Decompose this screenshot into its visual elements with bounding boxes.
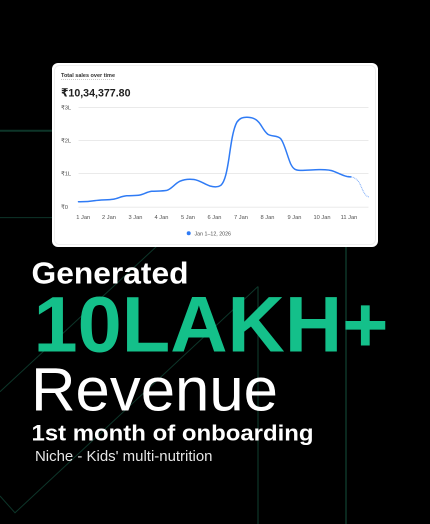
chart: x axis labels [76, 215, 357, 221]
heading: Generated: Generated [32, 256, 188, 290]
chart: x axis labels: 8 Jan [261, 215, 274, 221]
total sales value: ₹10,34,377.80 [61, 87, 130, 99]
chart: x axis labels: 6 Jan [208, 215, 221, 221]
niche note: Niche - Kids' multi-nutrition [35, 449, 212, 465]
chart: sales line [78, 117, 369, 202]
chart: x axis labels: 4 Jan [155, 215, 168, 221]
chart: x axis labels: 7 Jan [234, 215, 248, 221]
chart: x axis labels: 1 Jan [76, 215, 90, 221]
chart: x axis labels: 5 Jan [181, 215, 195, 221]
chart: x axis labels: 11 Jan [341, 215, 357, 221]
chart: x axis labels: 3 Jan [129, 215, 142, 221]
card heading: Total sales over time [61, 73, 116, 79]
chart: y axis labels and grid [61, 104, 368, 211]
chart: x axis labels: 2 Jan [102, 215, 116, 221]
chart: x axis labels: 9 Jan [288, 215, 301, 221]
chart: y axis labels and grid: ₹0 [61, 204, 68, 211]
headline figure: 10LAKH+: 10LAKH+ [34, 280, 388, 369]
subheading: 1st month of onboarding: 1st month of onboarding [32, 420, 314, 445]
chart legend: Jan 1–12, 2026 [194, 231, 231, 237]
panel: sales chart card [52, 63, 378, 247]
chart: y axis labels and grid: ₹3L [61, 104, 72, 112]
chart: y axis labels and grid: ₹2L [61, 138, 72, 144]
chart: x axis labels: 10 Jan [313, 215, 331, 221]
heading: Revenue: Revenue [31, 356, 278, 425]
chart: y axis labels and grid: ₹1L [61, 170, 72, 178]
background line pattern [0, 131, 346, 524]
